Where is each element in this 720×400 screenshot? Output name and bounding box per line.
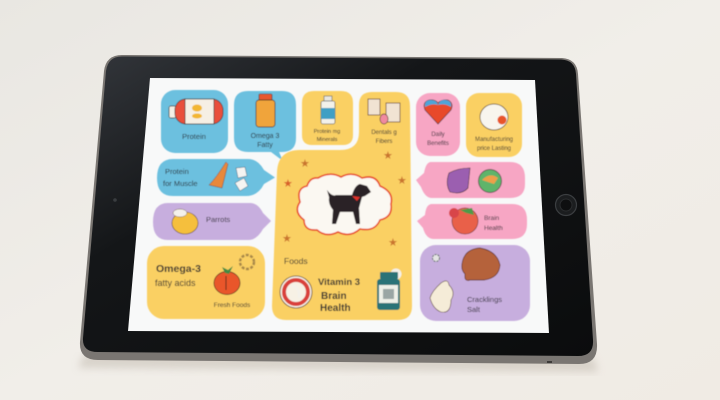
icon: stars <box>282 150 407 249</box>
icon: stars: ★ <box>300 158 310 170</box>
icon: bowl of food <box>480 104 508 130</box>
heading: omega-3: Omega-3 <box>156 263 201 275</box>
icon: stars: ★ <box>283 178 293 190</box>
label: parrots: Parrots <box>206 215 230 224</box>
label: protein: Protein <box>182 132 206 141</box>
panel: central yellow: Brain <box>321 291 347 302</box>
panel: small yellow bottle <box>302 91 353 145</box>
panel: pink bubble apple <box>417 204 527 239</box>
icon: stars: ★ <box>383 150 393 162</box>
camera <box>113 198 117 202</box>
label: bowl: Manufacturing <box>475 137 513 143</box>
icon: pumpkin <box>214 266 240 294</box>
label: fresh foods: Fresh Foods <box>214 302 251 309</box>
tablet shadow <box>78 354 598 372</box>
icon: popcorn <box>430 281 453 312</box>
icon: orange bottle <box>256 94 275 127</box>
label: protein for muscle: Protein <box>165 167 189 176</box>
icon: small flower <box>432 254 440 262</box>
panel: pink heart: Benefits <box>427 141 449 147</box>
label: fatty acids: fatty acids <box>155 278 196 288</box>
panel: pink heart <box>416 93 460 156</box>
panel: pink bubble vegetables <box>416 162 525 198</box>
panel: protein <box>161 90 228 153</box>
icon: dog in cloud <box>297 174 392 235</box>
icon: tomato apple <box>449 208 478 234</box>
label: small yellow: Protein mg <box>314 129 340 135</box>
icon: brown nut <box>462 248 500 280</box>
icon: heart <box>424 100 452 124</box>
icon: capsule packs <box>368 99 400 124</box>
panel: omega-3 fatty acids <box>147 246 265 319</box>
panel: omega-3 <box>234 91 296 161</box>
icon: supplement jar <box>377 268 402 310</box>
panel: purple nuts <box>420 245 530 321</box>
panel: blue bubble muscle: for Muscle <box>163 179 198 188</box>
panel: central yellow <box>272 92 412 320</box>
label: heart: Daily <box>431 132 445 138</box>
icon: bones <box>235 167 248 191</box>
icon: walnut <box>240 255 254 269</box>
icon: stars: ★ <box>397 175 407 187</box>
icon: carrot <box>209 162 228 188</box>
panel: blue bubble muscle <box>157 159 275 196</box>
infographic content <box>147 90 530 321</box>
panel: purple bubble <box>153 203 271 240</box>
label: brain: Brain <box>484 215 500 222</box>
panel: yellow bowl <box>466 93 522 157</box>
panel: yellow bowl: price Lasting <box>477 146 511 152</box>
panel: purple nuts: Salt <box>467 305 481 314</box>
label: top tab: Dentals g <box>371 130 397 136</box>
panel: central yellow: Fibers <box>376 139 392 145</box>
label: vitamin 3 brain health: Vitamin 3 <box>318 277 360 288</box>
icon: yellow chick <box>172 209 198 234</box>
icon: stars: ★ <box>282 233 292 245</box>
home button <box>556 194 576 216</box>
icon: purple vegetable <box>447 168 470 193</box>
panel: pink bubble apple: Health <box>484 225 503 232</box>
icon: stars: ★ <box>388 237 398 249</box>
label: foods: Foods <box>284 256 308 266</box>
icon: protein tub <box>169 99 223 124</box>
label: cooking: Cracklings <box>467 295 502 304</box>
icon: round badge <box>280 276 312 308</box>
icon: green globe <box>478 170 502 192</box>
panel: omega-3: Fatty <box>257 142 273 149</box>
panel: central yellow: Health <box>320 303 351 314</box>
panel: small yellow bottle: Minerals <box>317 137 338 143</box>
icon: blue bottle <box>321 96 335 124</box>
label: omega-3: Omega 3 <box>251 133 280 140</box>
tablet device <box>80 55 597 364</box>
bottom port <box>547 361 552 363</box>
screen <box>128 78 549 333</box>
